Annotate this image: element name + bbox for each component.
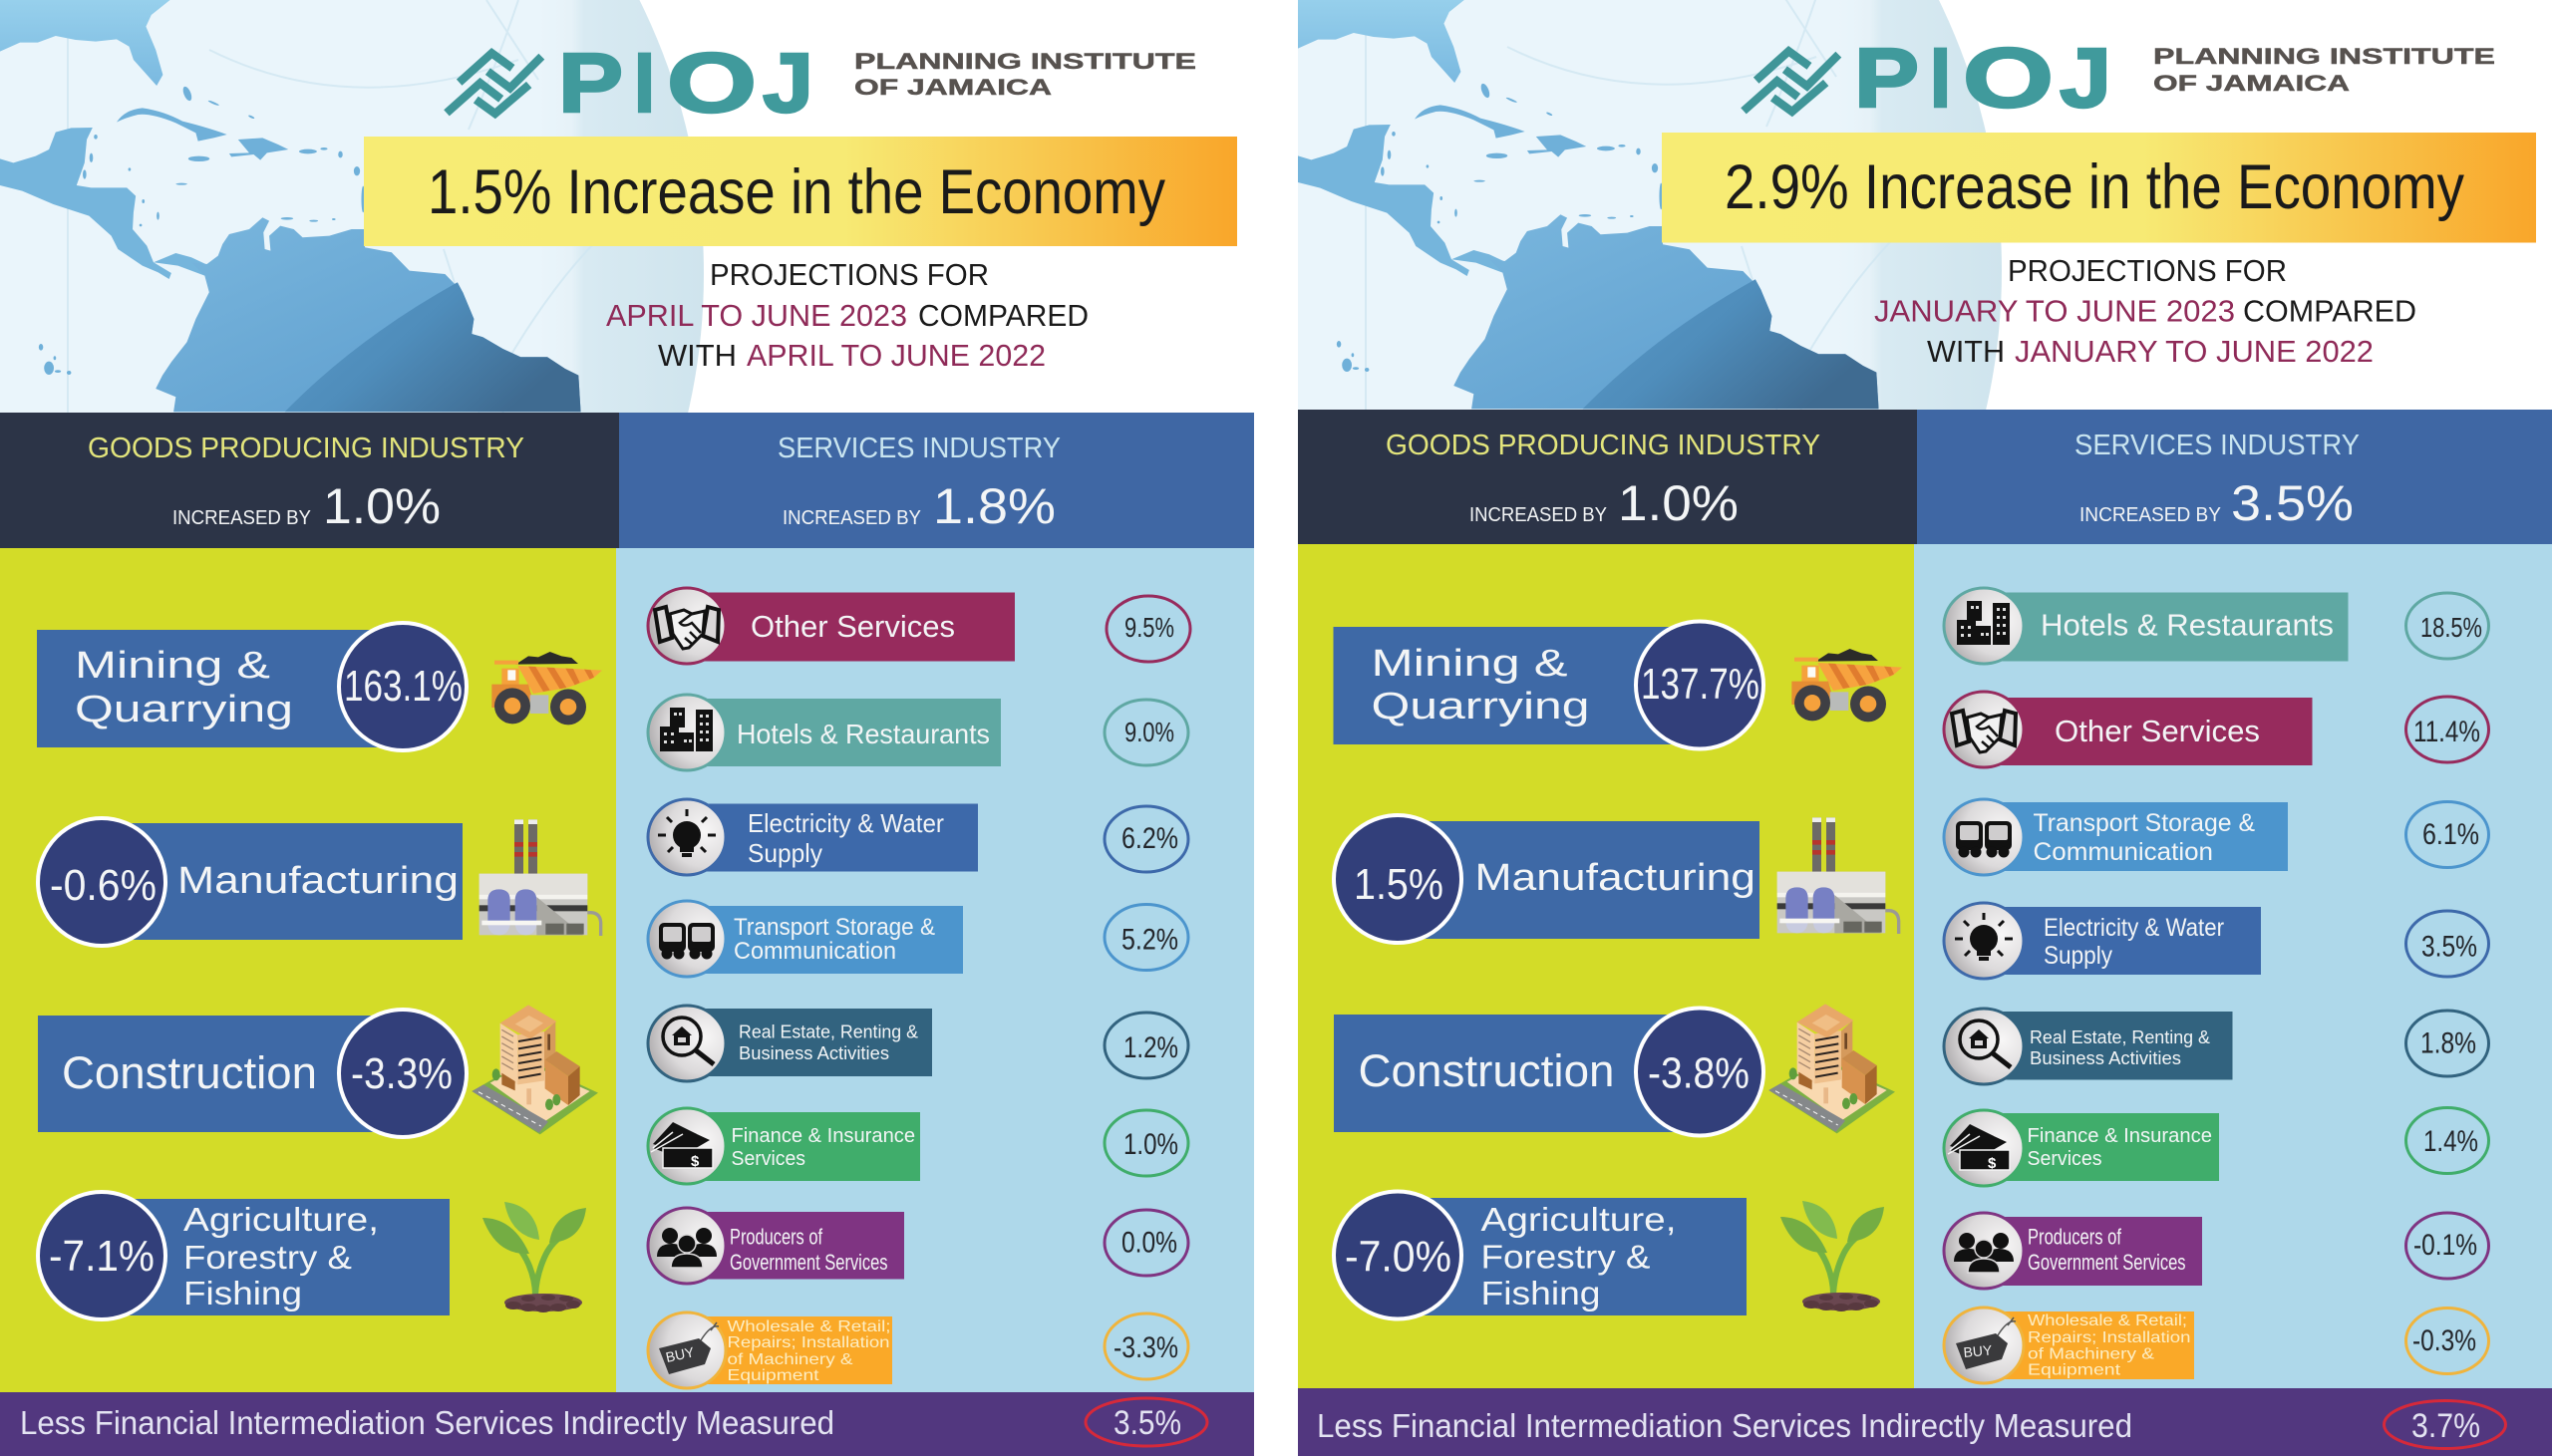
value: wholesale and retail: -3.3% — [1114, 1331, 1178, 1364]
footer: less FISIM: 3.7% — [2411, 1407, 2480, 1445]
value: finance and insurance — [2406, 1108, 2488, 1174]
subtitle: projections period: APRIL TO JUNE 2023 — [606, 298, 907, 333]
value: real estate — [2406, 1011, 2488, 1076]
panel: services background — [616, 548, 1254, 1392]
goods: mining and quarrying — [1334, 622, 1763, 749]
service: electricity and water supply: Supply — [748, 838, 822, 868]
service: wholesale and retail: BUY — [1963, 1341, 1994, 1360]
title banner: 1.5% Increase in the Economy — [428, 157, 1165, 227]
goods: construction: Construction — [62, 1047, 317, 1098]
service: electricity and water supply — [1944, 903, 2261, 979]
header: goods producing industry — [0, 413, 619, 548]
subtitle: projections period: COMPARED — [918, 298, 1089, 333]
service: wholesale and retail: Equipment — [2028, 1361, 2121, 1379]
goods: agriculture, forestry and fishing: Fishing — [183, 1275, 302, 1311]
service: other services: Other Services — [751, 609, 955, 644]
goods: manufacturing: Manufacturing — [177, 860, 459, 902]
service: wholesale and retail: Wholesale & Retail; — [728, 1318, 891, 1335]
value: transport storage and communication: 5.2% — [1121, 923, 1178, 957]
map background — [0, 0, 704, 890]
value: electricity and water supply — [2406, 911, 2488, 977]
service: producers of government services — [1944, 1213, 2202, 1289]
value: real estate: 1.2% — [1123, 1031, 1178, 1064]
logo: PIOJ: J — [2060, 31, 2111, 125]
subtitle: projections period: PROJECTIONS FOR — [710, 257, 989, 292]
service: transport storage and communication: Transport Storage & — [734, 914, 935, 941]
footer: less FISIM — [0, 1392, 1254, 1456]
value: producers of government services: -0.1% — [2413, 1229, 2477, 1262]
goods: agriculture, forestry and fishing: Fishing — [1481, 1275, 1601, 1311]
value: real estate — [1105, 1013, 1188, 1078]
panel: services background — [1914, 544, 2552, 1388]
goods: agriculture, forestry and fishing: -7.1% — [49, 1232, 155, 1281]
subtitle: projections period — [606, 257, 1089, 373]
map background — [770, 0, 2002, 887]
value: other services: 9.5% — [1124, 612, 1174, 643]
goods: mining and quarrying: Quarrying — [1372, 686, 1589, 728]
value: transport storage and communication: 6.1% — [2422, 818, 2479, 851]
service: real estate, renting and business activities: Business Activities — [2030, 1048, 2181, 1068]
subtitle: projections period: JANUARY TO JUNE 2023 — [1874, 293, 2235, 329]
service: wholesale and retail: of Machinery & — [728, 1351, 853, 1368]
service: electricity and water supply — [648, 799, 978, 875]
value: transport storage and communication — [1105, 905, 1188, 971]
service: finance and insurance services: Services — [2028, 1148, 2101, 1170]
service: producers of government services — [648, 1208, 904, 1284]
icon: building — [472, 1005, 598, 1134]
service: wholesale and retail — [648, 1312, 892, 1388]
service: finance and insurance services: Finance & Insurance — [732, 1125, 915, 1147]
subtitle: projections period: JANUARY TO JUNE 2022 — [2015, 334, 2374, 369]
value: hotels and restaurants: 9.0% — [1124, 717, 1174, 747]
value: producers of government services: 0.0% — [1121, 1226, 1177, 1260]
logo: PIOJ: P — [558, 36, 623, 130]
header: services industry: 3.5% — [2231, 475, 2354, 531]
goods: construction: -3.3% — [351, 1049, 453, 1098]
goods: mining and quarrying — [37, 623, 467, 750]
logo: PIOJ: OF JAMAICA — [2153, 71, 2350, 96]
footer: less FISIM — [1298, 1388, 2552, 1456]
header: services industry: INCREASED BY — [2079, 504, 2221, 526]
value: wholesale and retail — [2406, 1308, 2488, 1373]
goods: mining and quarrying: 163.1% — [344, 662, 463, 711]
service: finance and insurance services: $ — [691, 1153, 700, 1170]
value: finance and insurance — [1105, 1110, 1188, 1176]
header: goods producing industry: 1.0% — [1618, 475, 1739, 531]
header: services industry — [1917, 410, 2552, 544]
header: goods producing industry: 1.0% — [323, 478, 441, 534]
footer: less FISIM: 3.5% — [1114, 1404, 1181, 1442]
service: real estate, renting and business activities — [648, 1006, 932, 1081]
header: services industry: SERVICES INDUSTRY — [2074, 430, 2360, 461]
value: hotels and restaurants: 18.5% — [2420, 612, 2482, 643]
service: hotels and restaurants: Hotels & Restaurants — [737, 719, 990, 749]
value: wholesale and retail: -0.3% — [2412, 1324, 2476, 1357]
goods: agriculture, forestry and fishing: -7.0% — [1345, 1232, 1451, 1282]
value: electricity and water supply: 3.5% — [2421, 931, 2477, 963]
service: producers of government services: Producers of — [730, 1224, 823, 1250]
subtitle: projections period — [1874, 253, 2416, 369]
panel: January to June 2023 infographic — [770, 0, 2552, 1456]
header: goods producing industry: GOODS PRODUCING INDUSTRY — [1386, 430, 1820, 461]
value: producers of government services — [2406, 1213, 2488, 1279]
goods: mining and quarrying: 137.7% — [1641, 660, 1759, 709]
service: producers of government services: Government Services — [2028, 1250, 2185, 1275]
service: wholesale and retail — [1944, 1308, 2194, 1383]
service: wholesale and retail: of Machinery & — [2028, 1345, 2154, 1363]
value: hotels and restaurants — [2406, 593, 2488, 659]
service: transport storage and communication: Communication — [734, 938, 896, 965]
value: transport storage and communication — [2406, 801, 2488, 867]
panel: goods background — [0, 548, 616, 1392]
service: wholesale and retail: BUY — [664, 1343, 696, 1365]
header: goods producing industry — [1298, 410, 1917, 544]
goods: agriculture, forestry and fishing: Agriculture, — [183, 1201, 379, 1238]
service: real estate, renting and business activities: Real Estate, Renting & — [739, 1022, 918, 1042]
value: real estate: 1.8% — [2420, 1026, 2476, 1060]
subtitle: projections period: APRIL TO JUNE 2022 — [747, 338, 1046, 373]
goods: manufacturing — [38, 818, 463, 946]
goods: mining and quarrying: Mining & — [75, 645, 270, 687]
service: finance and insurance services: Services — [732, 1148, 805, 1170]
logo: PIOJ: P — [1854, 31, 1919, 125]
goods: construction: -3.8% — [1648, 1048, 1750, 1098]
service: transport storage and communication: Communication — [2034, 838, 2213, 866]
service: producers of government services: Producers of — [2028, 1224, 2122, 1250]
icon: factory — [1777, 817, 1899, 934]
title banner — [1662, 133, 2536, 243]
service: real estate, renting and business activities: Business Activities — [739, 1043, 889, 1063]
service: wholesale and retail: Equipment — [728, 1367, 819, 1384]
subtitle: projections period: COMPARED — [2243, 293, 2416, 329]
goods: agriculture, forestry and fishing: Forestry & — [1481, 1238, 1651, 1276]
footer: less FISIM: Less Financial Intermediation Services Indirectly Measured — [20, 1404, 834, 1441]
value: finance and insurance: 1.0% — [1123, 1128, 1178, 1161]
header: services industry: 1.8% — [933, 478, 1056, 534]
logo: PIOJ: OF JAMAICA — [854, 75, 1052, 100]
value: finance and insurance: 1.4% — [2423, 1125, 2478, 1158]
header: goods producing industry: INCREASED BY — [1469, 504, 1607, 526]
header: services industry: INCREASED BY — [783, 507, 921, 529]
goods: construction — [1334, 1009, 1763, 1136]
header: goods producing industry: GOODS PRODUCING INDUSTRY — [88, 433, 524, 464]
service: transport storage and communication — [1944, 799, 2288, 875]
service: finance and insurance services — [1944, 1110, 2219, 1186]
header: services industry — [619, 413, 1254, 548]
service: transport storage and communication — [648, 901, 963, 977]
icon: plant — [482, 1202, 586, 1312]
goods: manufacturing: -0.6% — [50, 861, 157, 910]
subtitle: projections period: WITH — [658, 338, 737, 373]
goods: manufacturing — [1334, 815, 1759, 943]
logo: PIOJ: J — [763, 36, 813, 130]
goods: agriculture, forestry and fishing — [38, 1192, 450, 1319]
service: wholesale and retail: Wholesale & Retail; — [2028, 1312, 2187, 1329]
service: hotels and restaurants: Hotels & Restaurants — [2041, 608, 2334, 642]
header: goods producing industry: INCREASED BY — [172, 507, 311, 529]
value: electricity and water supply: 6.2% — [1121, 822, 1178, 855]
goods: agriculture, forestry and fishing — [1334, 1192, 1747, 1319]
logo: PIOJ: I — [634, 36, 655, 130]
goods: construction: Construction — [1358, 1045, 1615, 1096]
service: real estate, renting and business activities: Real Estate, Renting & — [2030, 1027, 2210, 1047]
goods: agriculture, forestry and fishing: Forestry & — [183, 1239, 352, 1276]
service: electricity and water supply: Electricity & Water — [2044, 914, 2224, 942]
title banner: 2.9% Increase in the Economy — [1725, 152, 2464, 222]
service: wholesale and retail: Repairs; Installation — [2028, 1329, 2191, 1346]
icon: dump truck — [491, 652, 602, 725]
value: other services — [1107, 596, 1190, 662]
service: electricity and water supply: Electricity & Water — [748, 808, 944, 838]
logo: PIOJ: I — [1930, 31, 1951, 125]
value: other services — [2406, 697, 2488, 762]
goods: mining and quarrying: Mining & — [1372, 643, 1567, 685]
goods: mining and quarrying: Quarrying — [75, 689, 293, 730]
service: transport storage and communication: Transport Storage & — [2034, 809, 2255, 837]
icon: factory — [479, 819, 601, 936]
goods: manufacturing: 1.5% — [1354, 860, 1443, 909]
value: electricity and water supply — [1105, 806, 1188, 872]
logo: PIOJ — [447, 36, 1196, 130]
icon: dump truck — [1791, 649, 1902, 722]
icon: building — [1768, 1004, 1895, 1133]
subtitle: projections period: WITH — [1927, 334, 2005, 369]
goods: construction — [38, 1010, 467, 1137]
value: wholesale and retail — [1105, 1313, 1188, 1379]
logo: PIOJ: PLANNING INSTITUTE — [854, 49, 1196, 74]
logo: PIOJ: PLANNING INSTITUTE — [2153, 44, 2495, 69]
service: finance and insurance services — [648, 1108, 920, 1184]
logo: PIOJ: O — [667, 36, 757, 130]
service: hotels and restaurants — [648, 695, 1001, 770]
service: electricity and water supply: Supply — [2044, 942, 2112, 970]
service: finance and insurance services: Finance & Insurance — [2028, 1125, 2212, 1147]
service: wholesale and retail: Repairs; Installation — [728, 1334, 889, 1351]
goods: agriculture, forestry and fishing: Agriculture, — [1481, 1201, 1677, 1238]
service: producers of government services: Government Services — [730, 1250, 887, 1275]
service: other services — [648, 588, 1015, 664]
value: other services: 11.4% — [2413, 716, 2480, 748]
icon: plant — [1780, 1201, 1884, 1311]
service: other services — [1944, 692, 2313, 767]
service: hotels and restaurants — [1944, 588, 2349, 664]
service: real estate, renting and business activities — [1944, 1009, 2233, 1084]
value: hotels and restaurants — [1105, 700, 1188, 765]
panel: April to June 2023 infographic — [0, 0, 1254, 1456]
logo: PIOJ — [1744, 31, 2495, 125]
footer: less FISIM: Less Financial Intermediation Services Indirectly Measured — [1317, 1407, 2132, 1444]
title banner — [364, 137, 1237, 246]
service: other services: Other Services — [2055, 714, 2260, 748]
goods: manufacturing: Manufacturing — [1475, 857, 1755, 899]
header: services industry: SERVICES INDUSTRY — [778, 433, 1061, 464]
panel: goods background — [1298, 544, 1914, 1388]
value: producers of government services — [1105, 1210, 1188, 1276]
logo: PIOJ: O — [1963, 31, 2054, 125]
service: finance and insurance services: $ — [1988, 1155, 1997, 1172]
subtitle: projections period: PROJECTIONS FOR — [2008, 253, 2287, 288]
